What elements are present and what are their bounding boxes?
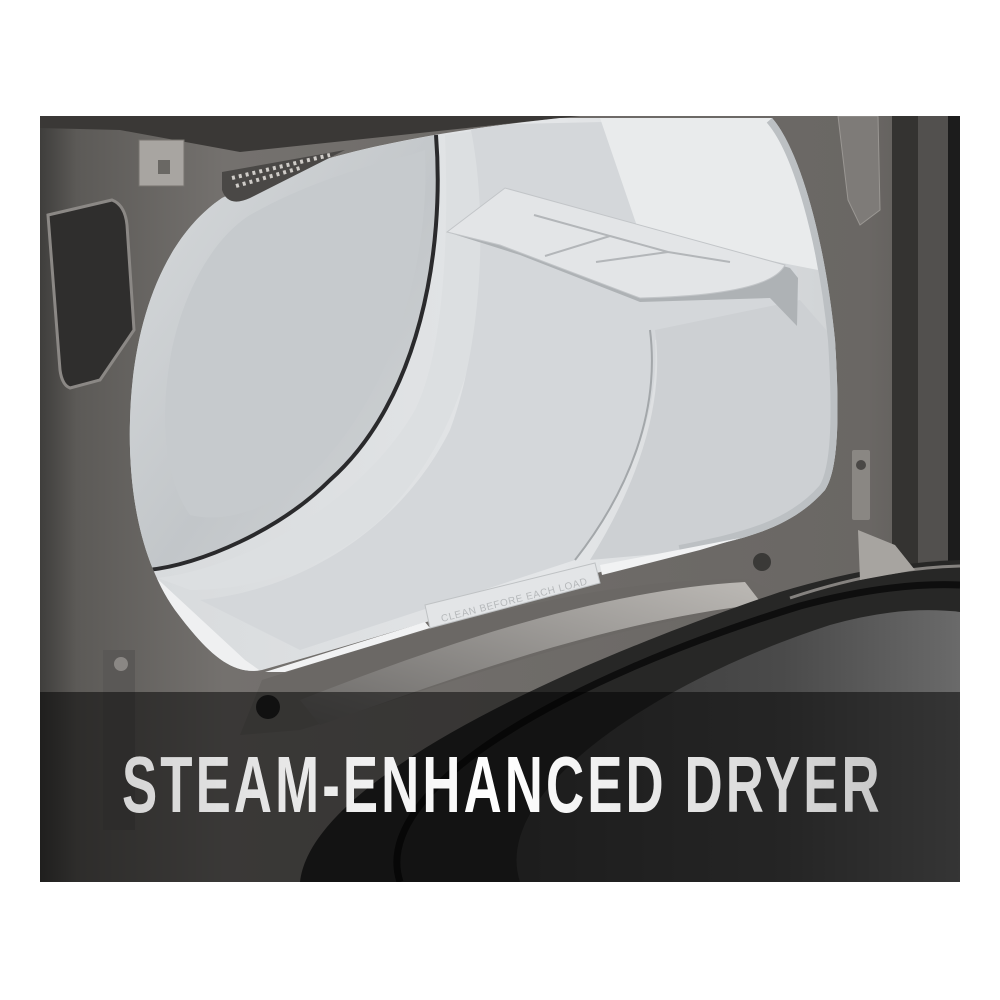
lint filter label <box>425 563 600 628</box>
right frame column <box>892 116 918 586</box>
right recess panel <box>838 116 880 225</box>
drum baffle <box>447 188 798 326</box>
dryer photo infographic <box>40 116 960 882</box>
upper right bright wall <box>600 118 818 270</box>
drum opening <box>120 116 850 686</box>
door window <box>517 610 960 882</box>
drum seam <box>575 330 652 560</box>
outer rim <box>680 118 838 552</box>
hinge left <box>114 650 135 692</box>
rear drum wall <box>128 135 438 570</box>
door gasket <box>397 585 960 882</box>
dark caption band <box>40 692 960 882</box>
sill highlight <box>322 582 758 698</box>
lower door sill <box>258 660 326 692</box>
top edge <box>40 116 580 152</box>
hinge right <box>852 450 915 580</box>
perforated vent <box>222 150 345 202</box>
open door <box>300 560 960 882</box>
left recess panel <box>48 200 134 388</box>
drum main wall <box>290 118 782 650</box>
right rim grey band <box>590 307 776 560</box>
right outer column <box>918 116 948 586</box>
mounting bracket <box>139 140 184 186</box>
screws <box>256 553 771 719</box>
photo panel <box>40 116 960 882</box>
rear inner dish <box>165 150 426 518</box>
title: STEAM-ENHANCED DRYER <box>122 741 880 830</box>
dryer body <box>40 116 960 882</box>
door highlight edge <box>790 566 960 598</box>
rear seal <box>148 135 438 570</box>
lint filter label: CLEAN BEFORE EACH LOAD <box>440 576 589 625</box>
lower left lint ledge <box>156 578 260 671</box>
lint strip <box>265 538 740 672</box>
lower drum band shading <box>158 130 486 590</box>
outer right edge <box>948 116 960 586</box>
